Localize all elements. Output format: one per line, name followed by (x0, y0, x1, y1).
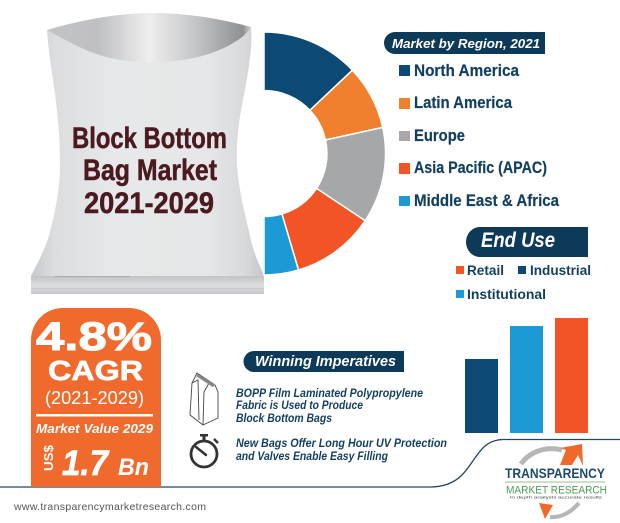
heading: end use: End Use (481, 229, 555, 252)
market value number: 1.7 (62, 444, 109, 483)
logo arc: lower (550, 503, 579, 517)
half-donut chart: market by region (264, 32, 386, 275)
title: line 2: Bag Market (83, 154, 217, 187)
end use legend (456, 262, 591, 302)
panel: CAGR and market value (31, 308, 161, 487)
market value label: Market Value 2029 (36, 421, 154, 436)
legend: Middle East and Africa: Middle East & Africa (414, 192, 560, 210)
logo arc: upper (521, 449, 562, 464)
legend: Asia Pacific: Asia Pacific (APAC) (414, 159, 547, 177)
bar: Institutional (510, 326, 543, 433)
segment: Asia Pacific (282, 188, 365, 270)
legend: Europe: Europe (414, 127, 465, 145)
segment: Middle East and Africa (264, 214, 298, 275)
logo tagline: in depth analysis accurate results (510, 494, 602, 500)
bar: Industrial (465, 359, 498, 433)
logo arrow: upper (560, 444, 583, 466)
region legend (399, 62, 560, 210)
legend: North America: North America (414, 62, 520, 80)
bar: Retail (555, 318, 588, 433)
title: line 1: Block Bottom (72, 122, 227, 155)
heading: market by region (384, 32, 545, 54)
text block: imperative two: and Valves Enable Easy Filling (236, 451, 388, 463)
currency label: US$ (41, 444, 56, 471)
heading: winning imperatives: Winning Imperatives (255, 353, 396, 370)
title: line 3: 2021-2029 (84, 187, 214, 220)
text block: imperative one: Block Bottom Bags (236, 413, 332, 425)
CAGR label: CAGR (48, 355, 143, 386)
icon: stopwatch (191, 434, 218, 467)
legend: Institutional: Institutional (467, 286, 546, 302)
bag body (31, 13, 264, 294)
legend: Retail: Retail (467, 262, 504, 278)
footer divider curve (0, 440, 620, 487)
segment: Latin America (310, 70, 383, 140)
logo subtitle: MARKET RESEARCH (506, 484, 607, 496)
segment: North America (264, 32, 352, 110)
bag bottom seal (31, 276, 264, 294)
logo wordmark: TRANSPARENCY (505, 465, 606, 481)
panel background (31, 308, 161, 487)
text block: imperative one: Fabric is Used to Produce (236, 400, 364, 412)
bar chart: end use (465, 318, 588, 433)
logo arrow: lower (539, 503, 553, 519)
bag illustration with title (31, 13, 264, 294)
text block: imperative two: New Bags Offer Long Hour UV Protection (236, 438, 447, 450)
legend: Industrial: Industrial (530, 262, 591, 278)
text block: imperative one: BOPP Film Laminated Polypropylene (236, 388, 424, 400)
heading: market by region: Market by Region, 2021 (392, 36, 540, 51)
bag opening (47, 13, 251, 62)
heading: end use (466, 227, 588, 257)
text block: imperative two (236, 438, 447, 463)
CAGR period: (2021-2029) (45, 388, 144, 408)
segment: Europe (316, 127, 386, 221)
market value unit: Bn (118, 454, 149, 481)
icon: block bottom bag (190, 373, 218, 425)
CAGR value: 4.8% (36, 315, 152, 359)
logo: Transparency Market Research (505, 444, 607, 519)
legend: Latin America: Latin America (414, 94, 513, 112)
text block: imperative one (236, 388, 424, 425)
website url: www.transparencymarketresearch.com (13, 501, 206, 513)
